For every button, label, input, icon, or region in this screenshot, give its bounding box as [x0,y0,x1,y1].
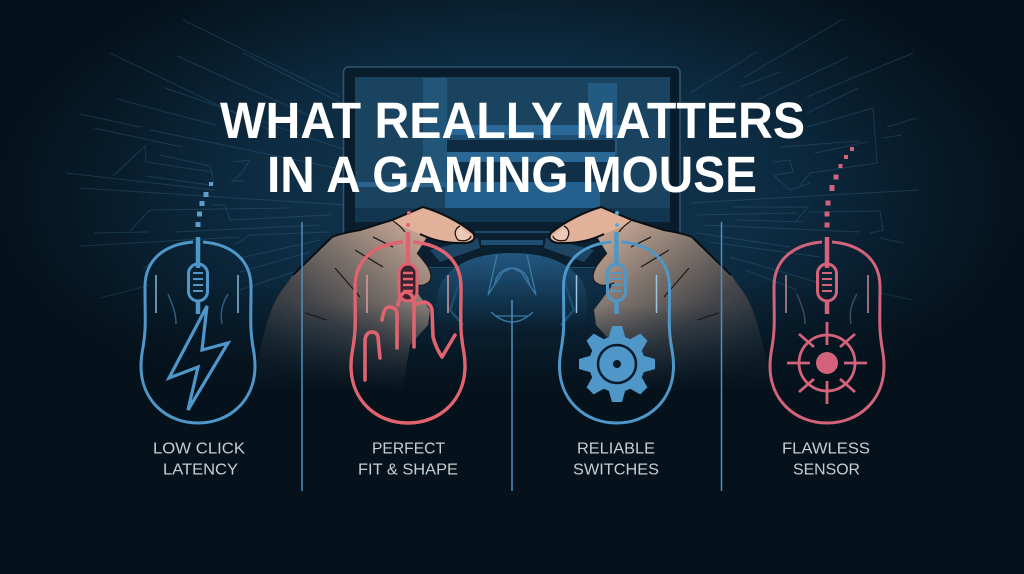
mouse outline: rose [770,237,884,423]
label: flawless sensor: FLAWLESS [782,440,870,458]
label: flawless sensor: SENSOR [793,462,860,478]
cable dots [406,211,411,227]
mouse outline: red [351,232,465,423]
mouse outline: blue [560,232,674,423]
monitor [344,67,680,267]
cable dots [824,147,854,228]
panel: perfect fit and shape [351,211,465,478]
title [220,92,805,203]
title: WHAT REALLY MATTERS [220,92,805,149]
infographic canvas [44,0,981,491]
dark lower fade [0,280,1024,574]
label: flawless sensor [782,440,870,478]
left hand [250,207,475,405]
label: low click latency [153,440,245,478]
cable dots [196,182,213,227]
label: reliable switches: RELIABLE [577,440,655,458]
panel: reliable switches [560,211,674,478]
label: reliable switches [573,440,659,478]
divider lines [302,222,722,491]
icon: lightning bolt [169,306,228,410]
panel: flawless sensor [770,147,884,478]
icon: hand [365,292,455,380]
cable dots [615,211,619,227]
label: low click latency: LATENCY [163,462,238,478]
icon: gear [579,326,655,402]
icon: crosshair [787,322,867,404]
label: reliable switches: SWITCHES [573,462,659,478]
panel: low click latency [141,182,255,478]
mouse outline: blue [141,237,255,423]
label: perfect fit and shape: FIT & SHAPE [358,462,458,478]
label: low click latency: LOW CLICK [153,440,245,458]
title: IN A GAMING MOUSE [267,146,757,203]
label: perfect fit and shape [358,440,458,478]
circuit lines right [690,19,918,300]
right hand [549,207,774,405]
central device under the hands [430,238,594,335]
circuit lines left [66,20,345,298]
label: perfect fit and shape: PERFECT [372,440,445,458]
